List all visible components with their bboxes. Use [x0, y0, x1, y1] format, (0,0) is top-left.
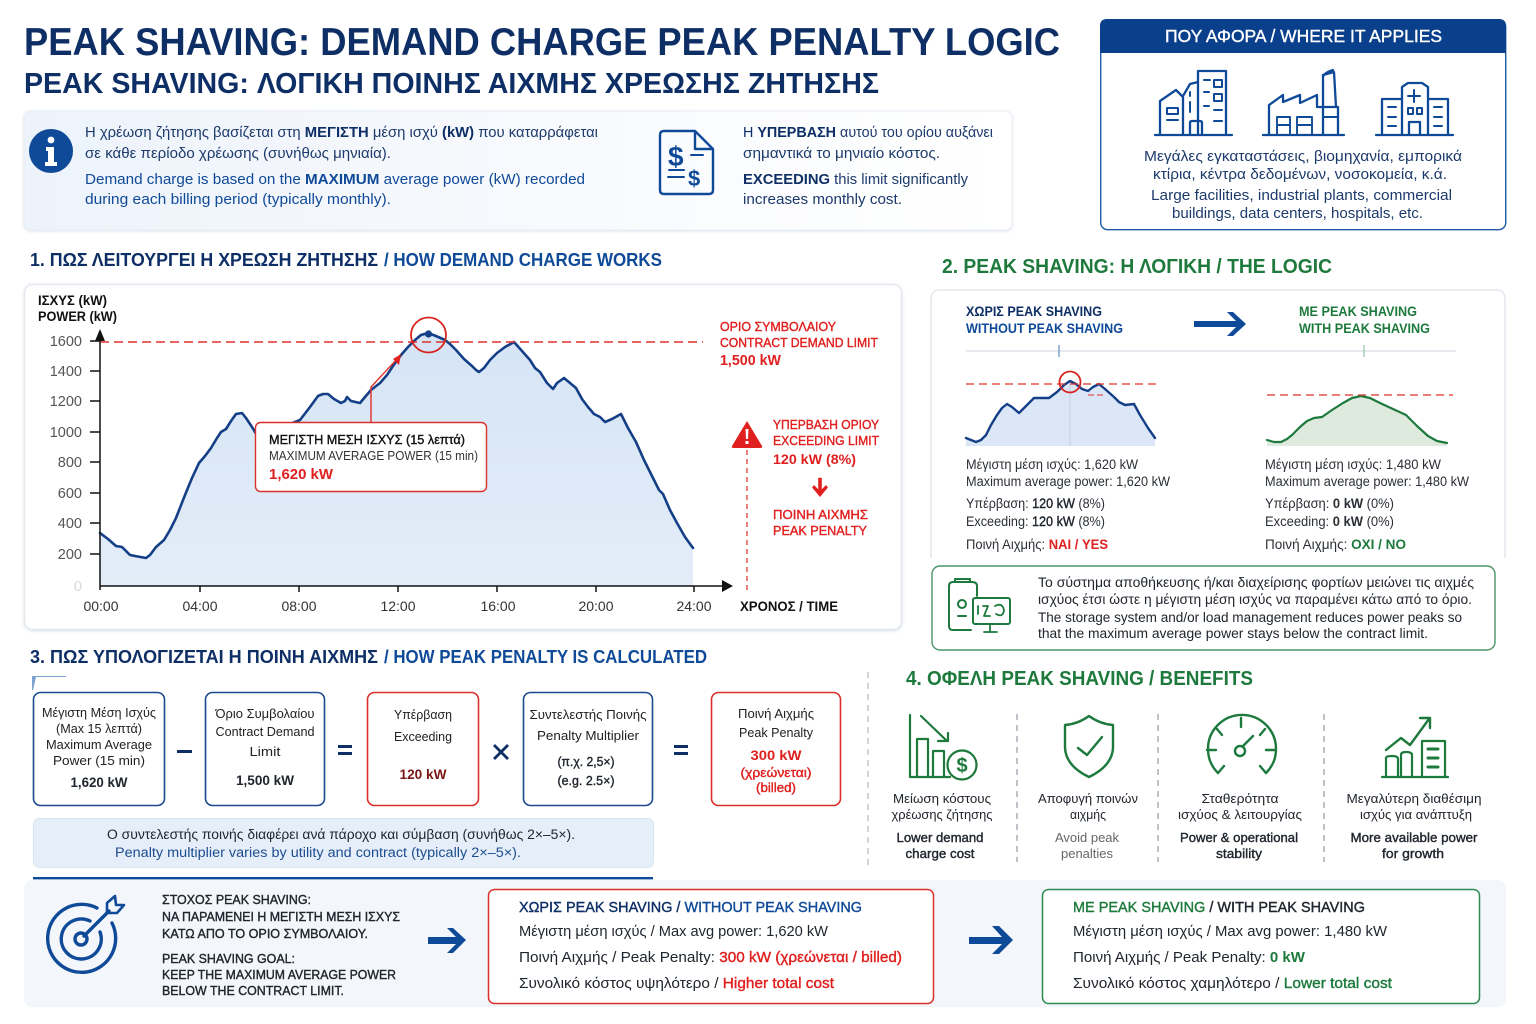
area chart: power over 24 hours — [50, 318, 880, 614]
benefit: more available power: ισχύς για ανάπτυξη — [1360, 807, 1472, 822]
stats: without peak shaving — [966, 457, 1170, 552]
box: peak penalty result: (billed) — [756, 780, 796, 795]
heading: section 3: / HOW PEAK PENALTY IS CALCULATED — [384, 646, 707, 667]
stats: with peak shaving: Ποινή Αιχμής: ΟΧΙ / ΝΟ — [1265, 537, 1406, 552]
label: without peak shaving: WITHOUT PEAK SHAVING — [966, 321, 1123, 336]
box: peak penalty result: Peak Penalty — [739, 725, 813, 740]
axes — [90, 333, 727, 592]
panel: benefits — [892, 715, 1482, 861]
box: peak penalty result: Ποινή Αιχμής — [738, 706, 814, 721]
panel: penalty formula — [34, 692, 840, 868]
stats: without peak shaving: Μέγιστη μέση ισχύς: 1,620 kW — [966, 457, 1138, 472]
y axis labels: 400 — [58, 516, 82, 532]
icon: bill document: $ — [688, 166, 700, 191]
label: with peak shaving: WITH PEAK SHAVING — [1299, 321, 1430, 336]
label: peak penalty: PEAK PENALTY — [773, 524, 868, 538]
box: contract demand limit: Όριο Συμβολαίου — [215, 706, 314, 721]
callout: maximum average power: ΜΕΓΙΣΤΗ ΜΕΣΗ ΙΣΧΥΣ (15 λεπτά) — [269, 432, 465, 447]
benefit: stability: Σταθερότητα — [1202, 791, 1279, 806]
text: peak shaving goal: ΝΑ ΠΑΡΑΜΕΝΕΙ Η ΜΕΓΙΣΤΗ ΜΕΣΗ ΙΣΧΥΣ — [162, 909, 400, 924]
y axis labels: 1200 — [50, 394, 82, 410]
benefit: avoid penalties: Avoid peak — [1055, 830, 1119, 845]
heading: section 2: 2. PEAK SHAVING: Η ΛΟΓΙΚΗ / THE LOGIC — [942, 256, 1332, 278]
y axis labels: 1000 — [50, 425, 82, 441]
label: with peak shaving — [1299, 304, 1430, 336]
x axis labels: 16:00 — [480, 598, 516, 614]
box: penalty multiplier: (e.g. 2.5×) — [558, 773, 614, 788]
panel: goal summary band — [24, 877, 1506, 1007]
note: multiplier range — [34, 818, 654, 868]
box: without peak shaving result: Ποινή Αιχμής / Peak Penalty: 300 kW (χρεώνεται / billed) — [519, 950, 902, 966]
text: peak shaving goal: PEAK SHAVING GOAL: — [162, 951, 295, 966]
chart axis title — [38, 293, 117, 324]
operator: equals — [338, 745, 352, 755]
benefit: stability: stability — [1216, 846, 1263, 861]
label: contract limit: 1,500 kW — [720, 353, 781, 369]
icon: target — [48, 896, 124, 972]
chart axis title: POWER (kW) — [38, 309, 117, 324]
text: peak shaving goal: KEEP THE MAXIMUM AVERAGE POWER — [162, 967, 396, 982]
label: contract limit: ΟΡΙΟ ΣΥΜΒΟΛΑΙΟΥ — [720, 320, 837, 334]
box: peak penalty result: 300 kW — [750, 747, 802, 763]
stats: without peak shaving: Maximum average power: 1,620 kW — [966, 474, 1170, 489]
title — [24, 21, 1060, 100]
text: applies description: Μεγάλες εγκαταστάσεις, βιομηχανία, εμπορικά — [1144, 148, 1462, 165]
label: exceeding limit — [773, 418, 880, 467]
benefit: lower demand charge cost: Μείωση κόστους — [893, 791, 991, 806]
x axis labels: 04:00 — [182, 598, 218, 614]
benefit: avoid penalties — [1038, 716, 1138, 861]
heading: section 1: / HOW DEMAND CHARGE WORKS — [384, 249, 662, 270]
panel: storage system note — [932, 566, 1495, 650]
label: without peak shaving: ΧΩΡΙΣ PEAK SHAVING — [966, 304, 1102, 319]
label: peak penalty — [773, 508, 868, 538]
heading: section 3 — [30, 646, 707, 667]
icon: information — [29, 129, 73, 173]
box: maximum average power: (Max 15 λεπτά) — [56, 721, 142, 736]
y axis labels: 1400 — [50, 364, 82, 380]
stats: without peak shaving: Ποινή Αιχμής: ΝΑΙ / YES — [966, 537, 1108, 552]
heading: section 1 — [30, 249, 662, 270]
panel: the logic comparison — [931, 290, 1505, 558]
label: peak penalty: ΠΟΙΝΗ ΑΙΧΜΗΣ — [773, 508, 868, 522]
text: exceeding limit note: Η ΥΠΕΡΒΑΣΗ αυτού του ορίου αυξάνει — [743, 125, 993, 141]
icon: bill document — [660, 131, 713, 194]
box: without peak shaving result: ΧΩΡΙΣ PEAK SHAVING / WITHOUT PEAK SHAVING — [519, 900, 862, 916]
text: exceeding limit note: EXCEEDING this limit significantly — [743, 172, 969, 188]
benefit: avoid penalties: Αποφυγή ποινών — [1038, 791, 1138, 806]
area chart: power over 24 hours: ΧΡΟΝΟΣ / TIME — [740, 599, 838, 614]
text: applies description — [1144, 148, 1462, 222]
heading: section 1: 1. ΠΩΣ ΛΕΙΤΟΥΡΓΕΙ Η ΧΡΕΩΣΗ ΖΗΤΗΣΗΣ — [30, 249, 378, 270]
benefit: avoid penalties: penalties — [1061, 846, 1113, 861]
benefit: stability: ισχύος & λειτουργίας — [1178, 807, 1302, 822]
arrow: to without scenario — [428, 928, 466, 953]
icon: gauge — [1207, 715, 1276, 773]
box: maximum average power — [34, 692, 164, 806]
x axis labels: 00:00 — [83, 598, 119, 614]
box: penalty multiplier — [524, 692, 652, 806]
label: exceeding limit: EXCEEDING LIMIT — [773, 434, 879, 448]
callout: maximum average power: 1,620 kW — [269, 466, 334, 483]
panel: definition intro card — [24, 111, 1012, 230]
text: applies description: Large facilities, industrial plants, commercial — [1151, 187, 1452, 204]
box: contract demand limit: Limit — [250, 744, 281, 759]
stats: with peak shaving — [1265, 457, 1469, 552]
icon: warning triangle — [732, 421, 762, 448]
box: contract demand limit: Contract Demand — [216, 724, 314, 739]
text: exceeding limit note: increases monthly cost. — [743, 192, 902, 208]
x axis labels: 24:00 — [676, 598, 712, 614]
benefit: avoid penalties: αιχμής — [1070, 807, 1106, 822]
box: maximum average power: Power (15 min) — [53, 753, 145, 768]
arrow: exceeding leads to penalty — [812, 478, 828, 496]
icon: hospital — [1376, 83, 1453, 135]
text: storage system explanation — [1038, 575, 1474, 641]
box: peak penalty result — [712, 692, 840, 806]
label: with peak shaving: ΜΕ PEAK SHAVING — [1299, 304, 1417, 319]
text: exceeding limit note — [743, 125, 993, 208]
text: storage system explanation: The storage system and/or load management reduces power peaks so — [1038, 610, 1462, 625]
box: without peak shaving result: Μέγιστη μέση ισχύς / Max avg power: 1,620 kW — [519, 924, 828, 940]
box: with peak shaving result: Ποινή Αιχμής / Peak Penalty: 0 kW — [1073, 950, 1305, 966]
text: demand charge definition: Demand charge is based on the MAXIMUM average power (kW) recorded — [85, 172, 585, 188]
box: with peak shaving result: Συνολικό κόστος χαμηλότερο / Lower total cost — [1073, 976, 1392, 992]
stats: with peak shaving: Exceeding: 0 kW (0%) — [1265, 514, 1394, 529]
icon: growth buildings — [1382, 718, 1448, 777]
box: with peak shaving result — [1042, 890, 1480, 1004]
y axis labels: 0 — [74, 579, 82, 595]
text: demand charge definition: during each billing period (typically monthly). — [85, 192, 391, 208]
text: exceeding limit note: σημαντικά το μηνιαίο κόστος. — [743, 146, 940, 162]
label: contract limit — [720, 320, 878, 369]
box: with peak shaving result: ΜΕ PEAK SHAVING / WITH PEAK SHAVING — [1073, 900, 1365, 916]
x axis labels — [83, 598, 712, 614]
text: peak shaving goal: BELOW THE CONTRACT LIMIT. — [162, 983, 344, 998]
benefit: more available power: More available power — [1350, 830, 1478, 845]
label: without peak shaving — [966, 304, 1123, 336]
icon: shield check — [1065, 716, 1113, 777]
benefit: more available power: for growth — [1382, 846, 1444, 861]
benefit: lower demand charge cost: charge cost — [906, 846, 975, 861]
box: without peak shaving result — [488, 890, 934, 1004]
y axis labels: 600 — [58, 486, 82, 502]
benefit: lower demand charge cost — [892, 715, 992, 861]
label: contract limit: CONTRACT DEMAND LIMIT — [720, 336, 878, 350]
heading: where it applies: ΠΟΥ ΑΦΟΡΑ / WHERE IT APPLIES — [1165, 26, 1442, 46]
box: penalty multiplier: Penalty Multiplier — [537, 728, 640, 743]
text: storage system explanation: ισχύος έτσι ώστε η μέγιστη μέση ισχύς να παραμένει κάτω από το όριο. — [1038, 592, 1472, 607]
arrow: without to with — [1194, 312, 1246, 336]
box: penalty multiplier: (π.χ. 2,5×) — [558, 754, 614, 769]
arrow: to with scenario — [969, 926, 1013, 954]
text: demand charge definition — [85, 125, 598, 208]
y axis labels — [50, 334, 82, 595]
panel: where it applies — [1100, 19, 1506, 230]
benefit: more available power — [1346, 718, 1482, 861]
stats: with peak shaving: Μέγιστη μέση ισχύς: 1,480 kW — [1265, 457, 1441, 472]
callout: maximum average power — [256, 422, 486, 492]
box: maximum average power: 1,620 kW — [70, 774, 128, 790]
operator: times — [493, 744, 509, 760]
benefit: stability — [1178, 715, 1302, 861]
heading: section 3: 3. ΠΩΣ ΥΠΟΛΟΓΙΖΕΤΑΙ Η ΠΟΙΝΗ ΑΙΧΜΗΣ — [30, 646, 378, 667]
mini chart: with peak shaving — [1267, 395, 1453, 446]
box: contract demand limit — [206, 692, 324, 806]
icon: falling cost — [910, 715, 976, 780]
limit line — [100, 341, 703, 343]
text: peak shaving goal: ΣΤΟΧΟΣ PEAK SHAVING: — [162, 892, 311, 907]
icon: falling cost: $ — [956, 755, 968, 777]
y axis labels: 800 — [58, 455, 82, 471]
label: exceeding limit: 120 kW (8%) — [773, 451, 856, 467]
title: PEAK SHAVING: DEMAND CHARGE PEAK PENALTY LOGIC — [24, 21, 1060, 64]
text: applies description: κτίρια, κέντρα δεδομένων, νοσοκομεία, κ.ά. — [1153, 166, 1447, 183]
title: PEAK SHAVING: ΛΟΓΙΚΗ ΠΟΙΝΗΣ ΑΙΧΜΗΣ ΧΡΕΩΣΗΣ ΖΗΤΗΣΗΣ — [24, 68, 879, 100]
peak marker — [411, 318, 446, 352]
box: maximum average power: Μέγιστη Μέση Ισχύς — [42, 705, 156, 720]
box: exceeding: Exceeding — [394, 729, 452, 744]
y axis labels: 1600 — [50, 334, 82, 350]
note: multiplier range: Ο συντελεστής ποινής διαφέρει ανά πάροχο και σύμβαση (συνήθως 2×–5×). — [107, 827, 575, 842]
text: storage system explanation: that the maximum average power stays below the contract limit. — [1038, 626, 1428, 641]
box: exceeding: 120 kW — [400, 766, 447, 782]
x axis labels: 20:00 — [578, 598, 614, 614]
stats: without peak shaving: Υπέρβαση: 120 kW (8%) — [966, 496, 1105, 511]
box: contract demand limit: 1,500 kW — [236, 772, 295, 788]
box: exceeding: Υπέρβαση — [394, 707, 452, 722]
panel: demand chart — [24, 284, 902, 630]
callout: maximum average power: MAXIMUM AVERAGE POWER (15 min) — [269, 448, 478, 463]
y axis labels: 200 — [58, 547, 82, 563]
icon: factory — [1263, 70, 1344, 135]
benefit: lower demand charge cost: χρέωσης ζήτησης — [892, 807, 992, 822]
note: multiplier range: Penalty multiplier varies by utility and contract (typically 2×–5×). — [115, 845, 521, 860]
text: demand charge definition: σε κάθε περίοδο χρέωσης (συνήθως μηνιαία). — [85, 146, 391, 162]
icon: battery and monitor — [949, 579, 1010, 632]
box: peak penalty result: (χρεώνεται) — [740, 765, 812, 780]
label: exceeding limit: ΥΠΕΡΒΑΣΗ ΟΡΙΟΥ — [773, 418, 880, 432]
benefit: lower demand charge cost: Lower demand — [896, 830, 984, 845]
box: with peak shaving result: Μέγιστη μέση ισχύς / Max avg power: 1,480 kW — [1073, 924, 1387, 940]
box: maximum average power: Maximum Average — [46, 737, 152, 752]
chart axis title: ΙΣΧΥΣ (kW) — [38, 293, 107, 308]
icon: commercial buildings — [1155, 71, 1232, 135]
text: applies description: buildings, data centers, hospitals, etc. — [1172, 205, 1423, 222]
heading: where it applies — [1100, 19, 1506, 53]
text: peak shaving goal — [162, 892, 400, 998]
text: demand charge definition: Η χρέωση ζήτησης βασίζεται στη ΜΕΓΙΣΤΗ μέση ισχύ (kW) που καταρράφεται — [85, 125, 598, 141]
mini chart: without peak shaving — [966, 372, 1157, 446]
box: penalty multiplier: Συντελεστής Ποινής — [530, 707, 646, 722]
x axis labels: 08:00 — [281, 598, 317, 614]
x axis labels: 12:00 — [380, 598, 416, 614]
benefit: more available power: Μεγαλύτερη διαθέσιμη — [1346, 791, 1482, 806]
operator: equals result — [674, 745, 688, 755]
text: peak shaving goal: ΚΑΤΩ ΑΠΟ ΤΟ ΟΡΙΟ ΣΥΜΒΟΛΑΙΟΥ. — [162, 926, 368, 941]
benefit: stability: Power & operational — [1180, 830, 1298, 845]
callout leader arrow — [371, 354, 401, 422]
text: storage system explanation: Το σύστημα αποθήκευσης ή/και διαχείρισης φορτίων μειώνει τις αιχμές — [1038, 575, 1474, 590]
box: exceeding — [368, 692, 478, 806]
box: without peak shaving result: Συνολικό κόστος υψηλότερο / Higher total cost — [519, 976, 834, 992]
stats: with peak shaving: Υπέρβαση: 0 kW (0%) — [1265, 496, 1394, 511]
operator: minus — [177, 750, 192, 753]
heading: section 4: 4. ΟΦΕΛΗ PEAK SHAVING / BENEFITS — [906, 668, 1253, 690]
stats: without peak shaving: Exceeding: 120 kW (8%) — [966, 514, 1105, 529]
icon: bill document: $ — [668, 141, 684, 172]
stats: with peak shaving: Maximum average power: 1,480 kW — [1265, 474, 1469, 489]
